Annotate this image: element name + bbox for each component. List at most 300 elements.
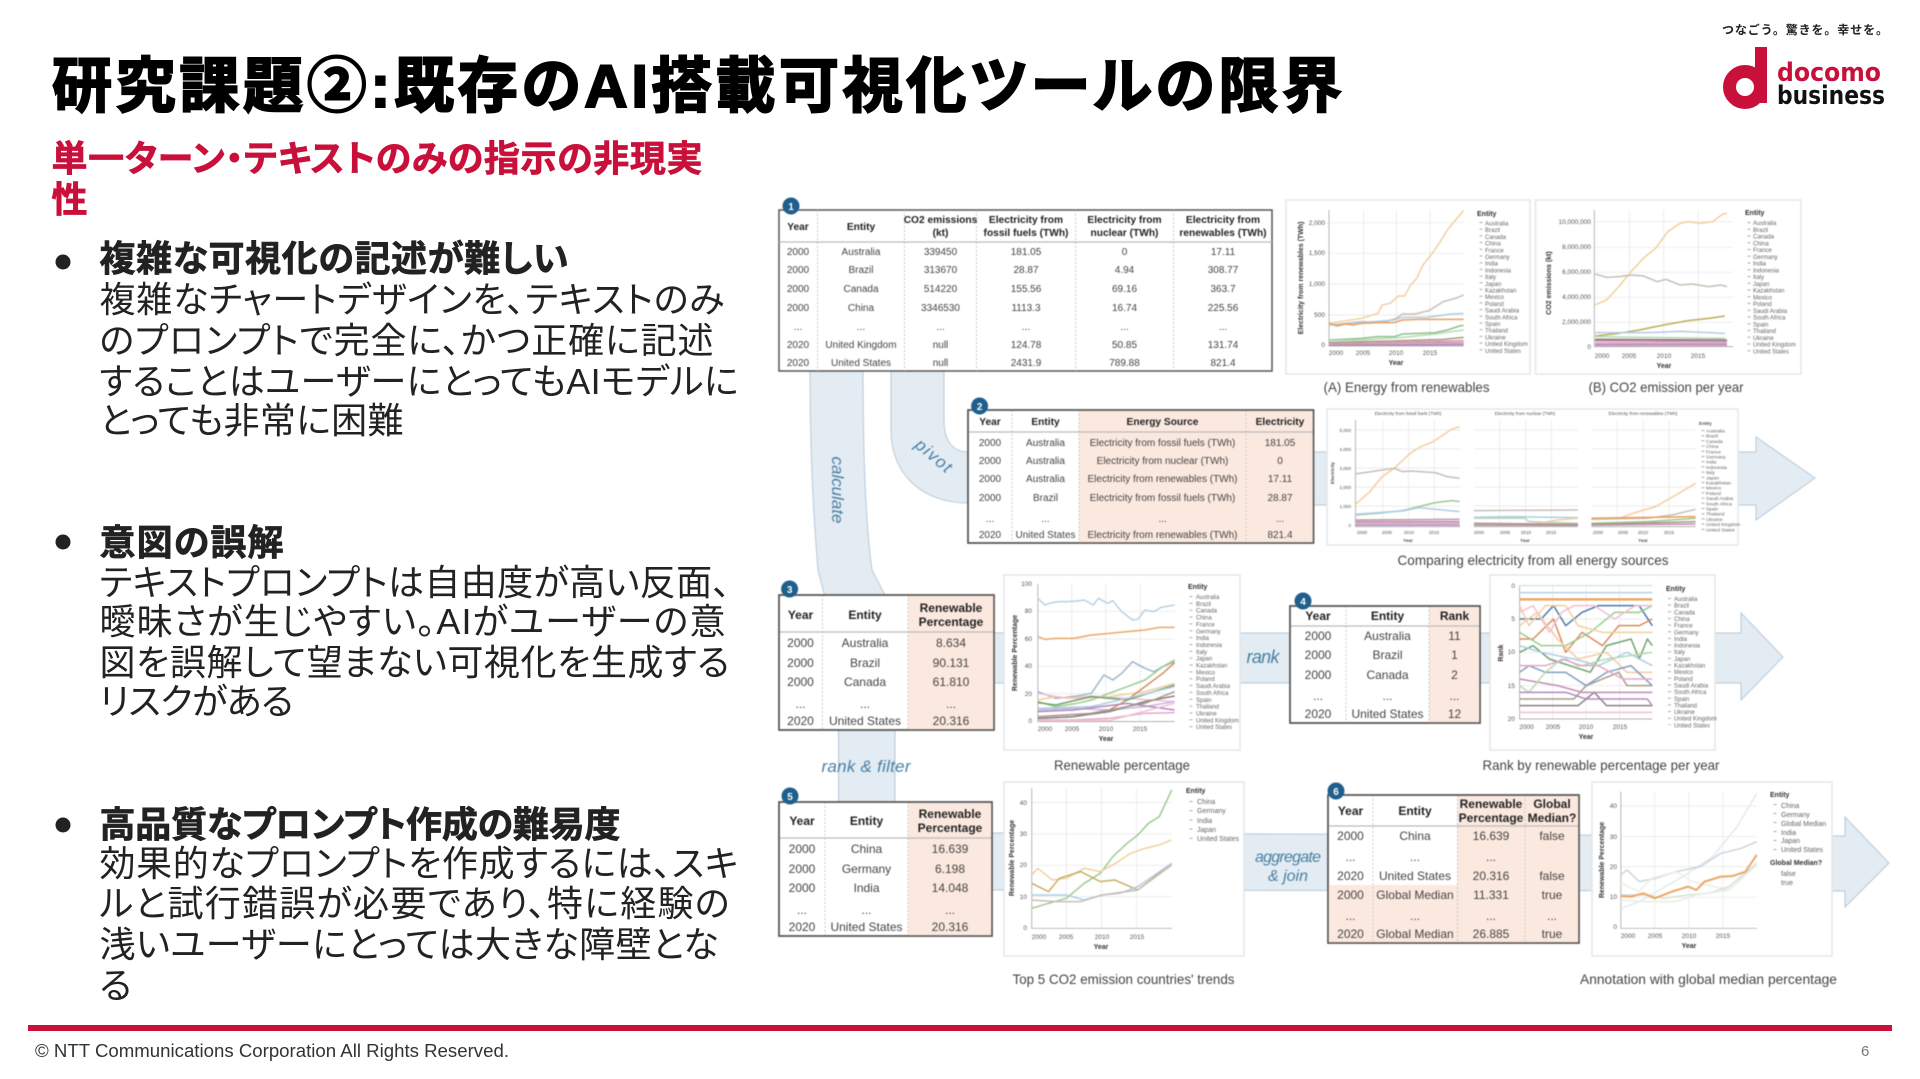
table 5: 14.048 — [932, 881, 969, 895]
table 1: Australia — [842, 247, 881, 258]
bullet block: misunderstanding of intent: 意図の誤解 — [100, 522, 284, 563]
chart: top 5 CO2 emission countries: 2005 — [1059, 934, 1074, 941]
chart B: CO2 emission per year: Indonesia — [1753, 268, 1780, 274]
chart: annotation with global median: Global Median? — [1770, 860, 1822, 867]
arrow: pivot output — [1313, 437, 1815, 520]
table 1: 313670 — [924, 265, 958, 276]
chart: top 5 CO2 emission countries: India — [1197, 818, 1212, 825]
table 2: Electricity from nuclear (TWh) — [1097, 456, 1228, 467]
table 3: 8.634 — [936, 636, 966, 650]
table 2: Electricity — [1256, 417, 1305, 428]
chart: top 5 CO2 emission countries: Year — [1094, 944, 1109, 951]
caption: renewable percentage: Renewable percentage — [1054, 757, 1190, 773]
table 5: 2000 — [789, 842, 816, 856]
chart A: energy from renewables: 1,500 — [1309, 250, 1325, 257]
chart: comparing electricity from all energy sources: Canada — [1706, 439, 1723, 445]
chart A: energy from renewables: 2000 — [1329, 350, 1344, 357]
chart: comparing electricity from all energy sources: 2010 — [1638, 530, 1649, 535]
table 2: ... — [1158, 514, 1167, 525]
chart B: CO2 emission per year: 2005 — [1622, 353, 1637, 360]
chart: top 5 CO2 emission countries: 2010 — [1095, 934, 1110, 941]
table 1: ... — [1022, 322, 1030, 333]
table 5: Germany — [842, 862, 891, 876]
table 2 — [968, 398, 1314, 543]
table 1: 2020 — [787, 340, 810, 351]
chart A: energy from renewables: 0 — [1321, 342, 1325, 349]
chart A: energy from renewables: South Africa — [1485, 315, 1518, 321]
table 6 — [1328, 782, 1579, 943]
chart: annotation with global median: Entity — [1770, 792, 1790, 799]
chart: comparing electricity from all energy sources: South Africa — [1706, 501, 1732, 507]
table 1: ... — [1120, 322, 1129, 333]
table 6: 2000 — [1337, 888, 1364, 902]
table 1: 2431.9 — [1011, 358, 1042, 369]
table 5: ... — [945, 903, 955, 917]
chart: renewable percentage: Poland — [1196, 677, 1215, 683]
table 2: United States — [1015, 530, 1076, 541]
chart: rank by renewable percentage: India — [1674, 637, 1688, 643]
chart: annotation with global median: Year — [1682, 943, 1697, 950]
chart: rank by renewable percentage: United Kingdom — [1674, 717, 1717, 723]
table 1: Entity — [847, 222, 875, 233]
chart: rank by renewable percentage: Kazakhstan — [1674, 664, 1705, 670]
chart: top 5 CO2 emission countries: Japan — [1197, 827, 1216, 834]
chart: renewable percentage: Brazil — [1196, 602, 1211, 608]
chart: comparing electricity from all energy sources: Japan — [1706, 475, 1719, 481]
chart: rank by renewable percentage: Poland — [1674, 677, 1693, 683]
bullet block: complex visualization description — [56, 238, 738, 441]
chart: rank by renewable percentage: 15 — [1508, 683, 1515, 690]
chart: rank by renewable percentage: 2015 — [1613, 724, 1628, 731]
table 4: 2000 — [1305, 629, 1332, 643]
chart: comparing electricity from all energy sources: Year — [1638, 538, 1648, 543]
chart: comparing electricity from all energy sources: China — [1706, 444, 1719, 450]
chart: annotation with global median: China — [1781, 803, 1799, 810]
table 2: Year — [979, 417, 1001, 428]
caption: comparing electricity: Comparing electricity from all energy sources — [1398, 552, 1668, 568]
table 1: Brazil — [848, 265, 874, 276]
table 2: Electricity from renewables (TWh) — [1087, 530, 1238, 541]
table 1: 821.4 — [1210, 358, 1236, 369]
chart: renewable percentage: Year — [1099, 736, 1114, 743]
chart: rank by renewable percentage: Japan — [1674, 657, 1690, 663]
chart: renewable percentage: Italy — [1196, 650, 1207, 656]
table 1: 363.7 — [1210, 284, 1236, 295]
chart B: CO2 emission per year: 4,000,000 — [1562, 294, 1591, 301]
chart B: CO2 emission per year: Spain — [1753, 322, 1768, 328]
table 4: United States — [1351, 707, 1424, 721]
chart: renewable percentage: Germany — [1196, 629, 1221, 635]
chart A: energy from renewables: France — [1485, 248, 1504, 254]
chart: renewable percentage: 0 — [1028, 718, 1032, 725]
chart: renewable percentage: Entity — [1188, 584, 1208, 591]
chart: rank by renewable percentage: Canada — [1674, 610, 1696, 616]
chart: renewable percentage: Indonesia — [1196, 643, 1223, 649]
table 1: ... — [857, 322, 865, 333]
chart: rank by renewable percentage: China — [1674, 617, 1690, 623]
table 4: 1 — [1451, 648, 1458, 662]
chart B: CO2 emission per year: 6,000,000 — [1562, 269, 1591, 276]
logo: docomo business: docomo — [1777, 58, 1881, 88]
chart: comparing electricity from all energy sources — [1327, 409, 1740, 545]
table 5: 2020 — [789, 920, 816, 934]
logo: docomo business: つなごう。驚きを。幸せを。 — [1722, 22, 1888, 37]
copyright: © NTT Communications Corporation All Rights Reserved. — [35, 1041, 509, 1061]
chart: comparing electricity from all energy sources: 2005 — [1382, 530, 1393, 535]
chart: rank by renewable percentage: 2005 — [1546, 724, 1561, 731]
label: aggregate and join — [1255, 849, 1321, 885]
caption: CO2 emission: (B) CO2 emission per year — [1588, 379, 1744, 395]
table 2: Australia — [1026, 456, 1065, 467]
table 5: China — [851, 842, 882, 856]
bullet block: misunderstanding of intent: 図を誤解して望まない可視化を生成する — [100, 642, 730, 683]
caption: energy from renewables: (A) Energy from renewables — [1324, 379, 1490, 395]
bullet block: complex visualization description: することはユーザーにとってもAIモデルに — [100, 361, 738, 402]
table 3: Australia — [842, 636, 889, 650]
table 5: 16.639 — [932, 842, 969, 856]
bullet block: complex visualization description: のプロンプトで完全に、かつ正確に記述 — [100, 320, 714, 361]
chart: comparing electricity from all energy sources: 2,000 — [1340, 485, 1351, 490]
table 1: nuclear (TWh) — [1091, 228, 1158, 239]
label: aggregate and join: aggregate — [1255, 849, 1321, 866]
chart B: CO2 emission per year: China — [1753, 241, 1769, 247]
table 3 — [779, 580, 994, 730]
chart: renewable percentage: Kazakhstan — [1196, 664, 1227, 670]
table 6: false — [1539, 869, 1565, 883]
table 3: ... — [860, 697, 870, 711]
title: 研究課題②:既存のAI搭載可視化ツールの限界 — [52, 53, 1342, 120]
chart: rank by renewable percentage: Rank — [1498, 644, 1505, 662]
table 3: Year — [788, 608, 814, 622]
chart: comparing electricity from all energy sources: Saudi Arabia — [1706, 496, 1734, 502]
table 1: Electricity from — [989, 215, 1063, 226]
chart: rank by renewable percentage: United States — [1674, 723, 1710, 729]
logo: docomo business: business — [1777, 81, 1885, 111]
table 1: CO2 emissions — [904, 215, 978, 226]
chart A: energy from renewables: Japan — [1485, 282, 1501, 288]
table 6: 2020 — [1337, 869, 1364, 883]
table 4: 12 — [1448, 707, 1461, 721]
chart: comparing electricity from all energy sources: Year — [1403, 538, 1413, 543]
table 5: ... — [861, 903, 872, 917]
chart: rank by renewable percentage: Australia — [1674, 597, 1698, 603]
chart: renewable percentage: South Africa — [1196, 691, 1229, 697]
table 2: Australia — [1026, 474, 1065, 485]
table 1: 155.56 — [1011, 284, 1042, 295]
table 2: 2000 — [979, 456, 1002, 467]
chart: comparing electricity from all energy sources: 5,000 — [1340, 428, 1351, 433]
table 4: ... — [1382, 689, 1393, 703]
table 4: Year — [1305, 609, 1331, 623]
table 2: 2020 — [979, 530, 1002, 541]
chart A: energy from renewables: Germany — [1485, 255, 1510, 261]
table 3: ... — [946, 697, 956, 711]
chart: renewable percentage: 40 — [1025, 663, 1032, 670]
table 6: 2000 — [1337, 829, 1364, 843]
chart: rank by renewable percentage: 10 — [1508, 649, 1515, 656]
table 6: false — [1539, 829, 1565, 843]
chart A: energy from renewables: India — [1485, 262, 1499, 268]
table 6: ... — [1345, 909, 1356, 923]
chart: renewable percentage: 60 — [1025, 636, 1032, 643]
table 4: 2000 — [1305, 668, 1332, 682]
chart B: CO2 emission per year: Australia — [1753, 221, 1777, 227]
chart: comparing electricity from all energy sources: France — [1706, 449, 1721, 455]
chart: rank by renewable percentage: Entity — [1666, 586, 1686, 593]
table 1: 17.11 — [1211, 247, 1236, 258]
chart B: CO2 emission per year: Brazil — [1753, 228, 1768, 234]
table 5: 2000 — [789, 862, 816, 876]
table 1: 1 — [788, 202, 794, 213]
chart A: energy from renewables: 2010 — [1389, 350, 1404, 357]
table 2: Entity — [1031, 417, 1060, 428]
chart: top 5 CO2 emission countries: 30 — [1020, 831, 1027, 838]
chart: top 5 CO2 emission countries: 20 — [1020, 862, 1027, 869]
table 6: Percentage — [1459, 811, 1524, 825]
table 2: 28.87 — [1267, 493, 1293, 504]
chart: renewable percentage: Canada — [1196, 609, 1218, 615]
subtitle: 単一ターン・テキストのみの指示の非現実 — [52, 138, 702, 179]
arrow: aggregate output — [991, 817, 1889, 907]
table 1: 4.94 — [1115, 265, 1135, 276]
table 3: 2000 — [787, 675, 814, 689]
arrow: rank output — [994, 613, 1783, 700]
table 4: Australia — [1364, 629, 1411, 643]
table 3: United States — [829, 714, 901, 728]
table 1: Electricity from — [1087, 215, 1162, 226]
chart A: energy from renewables: 2005 — [1356, 350, 1371, 357]
table 4: 11 — [1448, 629, 1461, 643]
chart: comparing electricity from all energy sources: United Kingdom — [1706, 522, 1740, 528]
table 1: Electricity from — [1186, 215, 1260, 226]
chart A: energy from renewables: Australia — [1485, 222, 1509, 228]
table 6: 2020 — [1337, 927, 1364, 941]
table 1: 16.74 — [1112, 303, 1137, 314]
table 3: 90.131 — [933, 656, 970, 670]
chart: renewable percentage: Saudi Arabia — [1196, 684, 1231, 690]
chart: renewable percentage: 20 — [1025, 691, 1032, 698]
chart: renewable percentage: United Kingdom — [1196, 718, 1239, 724]
subtitle: 性 — [52, 179, 88, 220]
table 2: Electricity from fossil fuels (TWh) — [1090, 438, 1235, 449]
table 1: 2020 — [787, 358, 810, 369]
bullet block: misunderstanding of intent: リスクがある — [100, 681, 294, 722]
chart: annotation with global median: India — [1781, 830, 1796, 837]
table 3: 20.316 — [933, 714, 970, 728]
chart: renewable percentage: 80 — [1025, 608, 1032, 615]
table 1: 124.78 — [1011, 340, 1042, 351]
table 6: ... — [1486, 909, 1496, 923]
chart A: energy from renewables: Year — [1389, 360, 1404, 367]
chart: comparing electricity from all energy sources: United States — [1706, 527, 1735, 533]
chart: top 5 CO2 emission countries: 40 — [1020, 800, 1027, 807]
chart B: CO2 emission per year: 2000 — [1595, 353, 1610, 360]
chart: renewable percentage: Mexico — [1196, 670, 1216, 676]
table 2: Energy Source — [1127, 417, 1199, 428]
table 1: 514220 — [924, 284, 958, 295]
chart: annotation with global median: 20 — [1610, 864, 1617, 871]
chart: top 5 CO2 emission countries: Entity — [1186, 788, 1206, 795]
chart: rank by renewable percentage: 5 — [1511, 616, 1515, 623]
table 1: 50.85 — [1112, 340, 1137, 351]
chart: comparing electricity from all energy sources: Italy — [1706, 470, 1715, 476]
chart: annotation with global median: Global Median — [1781, 821, 1826, 828]
chart: renewable percentage: United States — [1196, 725, 1232, 731]
table 4: Canada — [1366, 668, 1409, 682]
chart B: CO2 emission per year: Poland — [1753, 302, 1772, 308]
table 6: ... — [1486, 850, 1496, 864]
table 6: United States — [1379, 869, 1451, 883]
chart: comparing electricity from all energy sources: Mexico — [1706, 486, 1722, 492]
chart: comparing electricity from all energy sources: Spain — [1706, 506, 1719, 512]
table 6: ... — [1345, 850, 1356, 864]
bullet block: difficulty of quality prompts: 効果的なプロンプトを作成するには、スキ — [100, 843, 738, 884]
table 2: 821.4 — [1267, 530, 1293, 541]
bullet block: complex visualization description: 複雑な可視化の記述が難しい — [100, 238, 568, 279]
flow band: calculate — [810, 371, 886, 597]
bullet block: difficulty of quality prompts: 高品質なプロンプト作成の難易度 — [100, 804, 620, 845]
table 1: Canada — [843, 284, 879, 295]
table 4: ... — [1313, 689, 1323, 703]
table 6: true — [1542, 927, 1563, 941]
table 5: Year — [789, 814, 815, 828]
table 2: Electricity from renewables (TWh) — [1087, 474, 1238, 485]
chart: renewable percentage: 2010 — [1099, 726, 1114, 733]
table 3: 61.810 — [933, 675, 970, 689]
chart A: energy from renewables: Italy — [1485, 275, 1496, 281]
table 2: 2000 — [979, 474, 1002, 485]
bullet block: misunderstanding of intent: 曖昧さが生じやすい。AIがユーザーの意 — [100, 601, 726, 642]
table 6: 11.331 — [1473, 888, 1509, 902]
table 6: Renewable — [1460, 797, 1523, 811]
chart A: energy from renewables: Brazil — [1485, 228, 1500, 234]
table 1: 789.88 — [1109, 358, 1140, 369]
table 1: ... — [1219, 322, 1227, 333]
chart: comparing electricity from all energy sources: 0 — [1348, 523, 1351, 528]
chart: top 5 CO2 emission countries — [1004, 782, 1244, 956]
table 4: Entity — [1371, 609, 1404, 623]
chart A: energy from renewables: Indonesia — [1485, 268, 1512, 274]
chart: annotation with global median: false — [1781, 871, 1796, 878]
chart: top 5 CO2 emission countries: 2000 — [1032, 934, 1047, 941]
chart: renewable percentage: 2005 — [1065, 726, 1080, 733]
table 3: Entity — [848, 608, 882, 622]
chart: comparing electricity from all energy sources: Electricity from renewables (TWh) — [1609, 411, 1678, 416]
chart B: CO2 emission per year: Italy — [1753, 275, 1764, 281]
chart B: CO2 emission per year: Entity — [1745, 210, 1765, 217]
chart: comparing electricity from all energy sources: Brazil — [1706, 434, 1718, 440]
chart B: CO2 emission per year: United States — [1753, 349, 1789, 355]
chart: comparing electricity from all energy sources: Germany — [1706, 454, 1726, 460]
chart: top 5 CO2 emission countries: United States — [1197, 836, 1240, 843]
chart: renewable percentage: 2015 — [1133, 726, 1148, 733]
chart: comparing electricity from all energy sources: 3,000 — [1340, 466, 1351, 471]
table 5: 2000 — [789, 881, 816, 895]
chart: rank by renewable percentage: Indonesia — [1674, 644, 1701, 650]
flow band: rank and filter — [822, 730, 912, 802]
chart: rank by renewable percentage: Spain — [1674, 697, 1689, 703]
table 6: Entity — [1398, 804, 1432, 818]
chart: renewable percentage: 100 — [1021, 581, 1032, 588]
table 1: 2000 — [787, 284, 810, 295]
table 2: 0 — [1277, 456, 1283, 467]
table 6: China — [1399, 829, 1431, 843]
chart: renewable percentage: Ukraine — [1196, 712, 1217, 718]
chart A: energy from renewables: Poland — [1485, 302, 1504, 308]
table 6: Year — [1338, 804, 1364, 818]
footer rule — [28, 1025, 1892, 1031]
chart: renewable percentage: Japan — [1196, 657, 1212, 663]
chart: rank by renewable percentage: 2000 — [1519, 724, 1534, 731]
table 1: 28.87 — [1013, 265, 1039, 276]
chart: comparing electricity from all energy sources: Ukraine — [1706, 517, 1723, 523]
table 5: 20.316 — [932, 920, 969, 934]
table 3: ... — [795, 697, 806, 711]
table 1: 2000 — [787, 265, 810, 276]
chart: renewable percentage — [1004, 575, 1240, 750]
table 4: 2000 — [1305, 648, 1332, 662]
bullet block: difficulty of quality prompts: る — [100, 965, 132, 1006]
chart B: CO2 emission per year: Germany — [1753, 255, 1778, 261]
table 5: 6.198 — [935, 862, 965, 876]
table 4 — [1290, 592, 1480, 723]
table 6: true — [1542, 888, 1563, 902]
chart: comparing electricity from all energy sources: India — [1706, 460, 1717, 466]
chart: comparing electricity from all energy sources: 2000 — [1474, 530, 1485, 535]
table 2: Electricity from fossil fuels (TWh) — [1090, 493, 1235, 504]
chart B: CO2 emission per year: Canada — [1753, 234, 1775, 240]
subtitle — [52, 138, 702, 220]
chart A: energy from renewables: China — [1485, 242, 1501, 248]
chart: rank by renewable percentage: Germany — [1674, 630, 1699, 636]
chart: rank by renewable percentage: Saudi Arabia — [1674, 684, 1709, 690]
chart B: CO2 emission per year: Ukraine — [1753, 336, 1774, 342]
figure: data transformation flow — [779, 198, 1889, 987]
table 4: ... — [1449, 689, 1460, 703]
table 1: (kt) — [933, 228, 948, 239]
chart B: CO2 emission per year: Saudi Arabia — [1753, 309, 1788, 315]
chart: annotation with global median: 2010 — [1682, 933, 1697, 940]
chart: annotation with global median: Germany — [1781, 812, 1810, 819]
table 1: null — [933, 358, 948, 369]
table 6: Median? — [1528, 811, 1576, 825]
table 5: Entity — [850, 814, 883, 828]
table 1: 225.56 — [1208, 303, 1239, 314]
chart A: energy from renewables: Spain — [1485, 322, 1500, 328]
chart A: energy from renewables: Canada — [1485, 235, 1507, 241]
chart: comparing electricity from all energy sources: Thailand — [1706, 512, 1725, 518]
table 1: 339450 — [924, 247, 958, 258]
table 6: Global — [1533, 797, 1571, 811]
chart: comparing electricity from all energy sources: 2000 — [1357, 530, 1368, 535]
chart: renewable percentage: Spain — [1196, 698, 1211, 704]
table 6: 26.885 — [1473, 927, 1510, 941]
chart: comparing electricity from all energy sources: Indonesia — [1706, 465, 1727, 471]
table 3: 3 — [787, 585, 793, 596]
chart: rank by renewable percentage: 0 — [1511, 583, 1515, 590]
chart: rank by renewable percentage — [1490, 575, 1717, 750]
table 4: Brazil — [1372, 648, 1403, 662]
table 4: 2 — [1451, 668, 1458, 682]
table 1: 69.16 — [1112, 284, 1137, 295]
chart A: energy from renewables: United States — [1485, 349, 1521, 355]
chart B: CO2 emission per year: Kazakhstan — [1753, 288, 1784, 294]
table 1: 2000 — [787, 247, 810, 258]
label: aggregate and join: & join — [1268, 868, 1308, 885]
chart A: energy from renewables: United Kingdom — [1485, 342, 1528, 348]
chart: rank by renewable percentage: 20 — [1508, 716, 1515, 723]
table 1 — [779, 198, 1272, 371]
